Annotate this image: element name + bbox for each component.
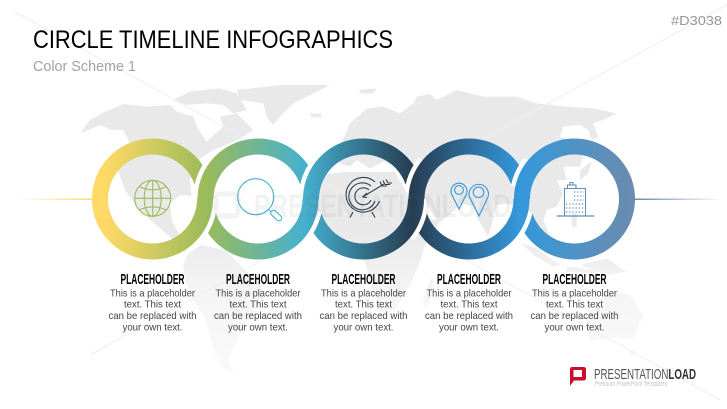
ring segment 1 (92, 138, 308, 259)
circle chain (92, 138, 635, 260)
logo tagline: Premium PowerPoint Templates (595, 379, 667, 388)
text column 1 (108, 271, 197, 333)
text column 3 (320, 271, 408, 333)
text column 5: PLACEHOLDER (542, 271, 607, 288)
icon: map pins (451, 183, 488, 216)
text column 4: can be replaced with (425, 310, 513, 322)
text column 4 (425, 271, 513, 333)
text column 5 (530, 271, 619, 333)
ring segment 3 (313, 138, 519, 260)
world map background (0, 85, 727, 385)
white gaps between rings (197, 159, 530, 239)
logo wordmark: PRESENTATIONLOAD (594, 366, 696, 383)
text column 3: PLACEHOLDER (332, 271, 396, 288)
ring segment 2 (208, 138, 414, 260)
logo: PresentationLoad (570, 366, 696, 388)
text column 3: can be replaced with (320, 310, 408, 322)
text column 5: your own text. (544, 321, 604, 333)
watermark (216, 188, 511, 224)
text column 2 (214, 271, 302, 333)
text column 1: This is a placeholder (110, 287, 195, 299)
icon: target with arrow (346, 177, 392, 218)
text column 2: your own text. (228, 321, 288, 333)
text column 2: text. This text (230, 299, 287, 311)
text column 1: text. This text (124, 299, 181, 311)
text column 2: can be replaced with (214, 310, 302, 322)
right connector line (635, 198, 722, 200)
text column 4: text. This text (440, 299, 498, 311)
text column 5: text. This text (546, 299, 603, 311)
text column 4: This is a placeholder (426, 287, 512, 299)
text column 4: PLACEHOLDER (437, 271, 501, 288)
text column 1: PLACEHOLDER (120, 271, 185, 288)
text column 2: PLACEHOLDER (226, 271, 290, 288)
watermark: PRESENTATIONLOAD (254, 188, 511, 224)
text column 1: your own text. (122, 321, 182, 333)
icon: magnifier (238, 179, 283, 222)
product code: #D3038 (671, 14, 722, 28)
text column 3: text. This text (335, 299, 392, 311)
icon: globe (135, 180, 171, 216)
text column 5: can be replaced with (530, 310, 619, 322)
text column 3: your own text. (334, 321, 394, 333)
icon: building (557, 182, 594, 216)
subtitle: Color Scheme 1 (33, 59, 136, 75)
text column 5: This is a placeholder (532, 287, 617, 299)
text column 2: This is a placeholder (216, 287, 301, 299)
left connector line (18, 198, 92, 200)
text column 3: This is a placeholder (321, 287, 406, 299)
text column 4: your own text. (439, 321, 499, 333)
ring segment 4 (419, 139, 635, 260)
logo icon (570, 367, 586, 386)
text column 1: can be replaced with (108, 310, 197, 322)
title: CIRCLE TIMELINE INFOGRAPHICS (33, 26, 393, 54)
